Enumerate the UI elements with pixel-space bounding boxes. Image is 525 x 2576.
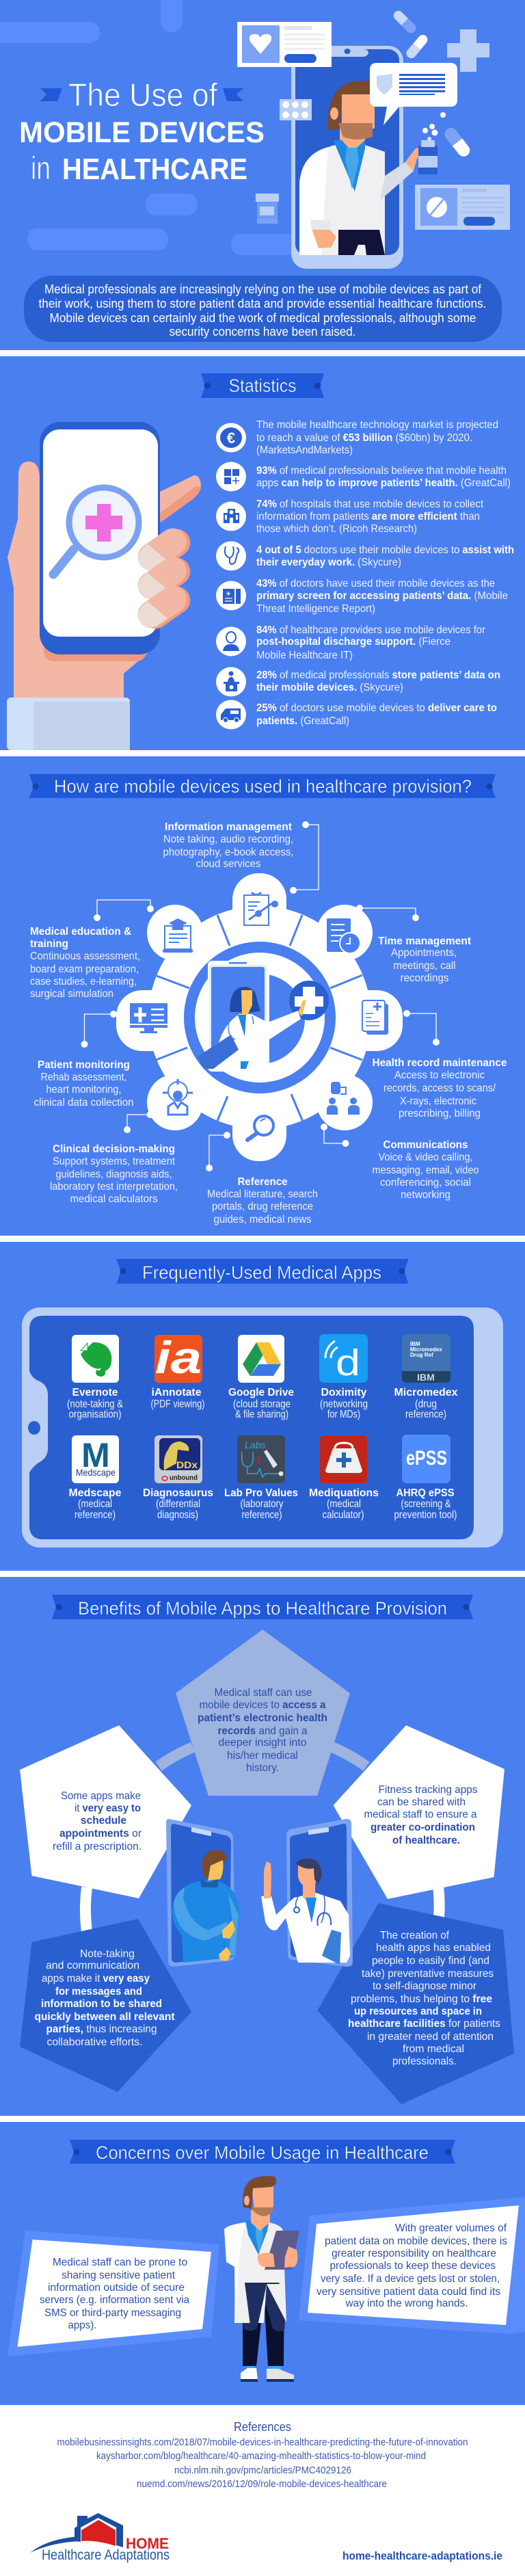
app: doximity: d xyxy=(336,1342,360,1383)
label: communications xyxy=(372,1139,479,1201)
label: reference: portals, drug reference xyxy=(212,1201,313,1212)
label: health record maintenance: records, access to scans/ xyxy=(383,1083,496,1094)
heading: concerns: Concerns over Mobile Usage in Healthcare xyxy=(96,2142,429,2163)
benefit: resources: healthcare facilities for patients xyxy=(348,2018,500,2030)
label: medical education: training xyxy=(30,938,68,950)
references: ncbi.nlm.nih.gov/pmc/articles/PMC4029126 xyxy=(174,2465,351,2476)
label: patient monitoring: heart monitoring, xyxy=(46,1084,122,1096)
concern panel: lost devices: With greater volumes of xyxy=(395,2222,507,2234)
label: clinical decision-making: laboratory test interpretation, xyxy=(50,1181,178,1193)
label: medical education: Medical education & xyxy=(30,926,131,938)
app: epss: (screening & xyxy=(401,1498,451,1510)
heading: statistics xyxy=(201,373,324,398)
small pill bottle xyxy=(256,194,279,224)
medical card with heart xyxy=(237,22,332,67)
app: medscape: reference) xyxy=(75,1509,116,1521)
benefit: scheduling xyxy=(20,1725,191,1898)
app: google drive: & file sharing) xyxy=(235,1409,288,1420)
label: medical education: surgical simulation xyxy=(30,988,113,1000)
title: MOBILE DEVICES xyxy=(19,116,265,149)
benefit: communication xyxy=(20,1919,191,2092)
label: time management: Appointments, xyxy=(391,947,457,959)
benefit: health records xyxy=(176,1630,350,1796)
stat 4 xyxy=(216,542,514,570)
label: clinical decision-making: medical calculators xyxy=(70,1193,157,1205)
benefit: fitness tracking: of healthcare. xyxy=(392,1835,460,1846)
app: diagnosaurus: Diagnosaurus xyxy=(143,1487,213,1499)
stat 2: apps can help to improve patients’ health. (GreatCall) xyxy=(256,477,511,489)
app: iannotate: ia xyxy=(155,1332,202,1383)
references: kaysharbor.com/blog/healthcare/40-amazing-mhealth-statistics-to-blow-your-mind xyxy=(96,2450,426,2462)
stat 8 xyxy=(216,700,497,729)
app: micromedex: IBM xyxy=(410,1341,420,1347)
fingers xyxy=(133,522,196,636)
app: google drive: Google Drive xyxy=(228,1387,294,1398)
references: nuemd.com/news/2016/12/09/role-mobile-devices-healthcare xyxy=(137,2478,387,2490)
stat 1: (MarketsAndMarkets) xyxy=(256,444,353,456)
label: information management: cloud services xyxy=(196,858,261,870)
stat 5: 43% of doctors have used their mobile devices as the xyxy=(256,578,495,589)
sleeve xyxy=(7,698,130,750)
gear diagram xyxy=(116,873,403,1161)
app: micromedex: (drug xyxy=(415,1398,437,1410)
stat 4: their everyday work. (Skycure) xyxy=(256,557,401,568)
concern panel: lost devices: way into the wrong hands. xyxy=(345,2298,468,2309)
benefit: resources: problems, thus helping to free xyxy=(351,1993,492,2005)
stat 5: Threat Intelligence Report) xyxy=(256,603,375,615)
app: iannotate: iAnnotate xyxy=(152,1387,202,1398)
label: health record maintenance: Access to electronic xyxy=(394,1070,485,1081)
header section xyxy=(0,0,510,342)
benefit: health records: his/her medical xyxy=(227,1750,298,1762)
benefit: scheduling: schedule xyxy=(81,1815,126,1827)
app: epss xyxy=(394,1435,457,1521)
stat 1: € xyxy=(227,429,235,447)
references: References xyxy=(234,2420,291,2434)
label: time management: Time management xyxy=(378,935,472,947)
label: health record maintenance: prescribing, billing xyxy=(399,1108,481,1119)
label: information management: photography, e-book access, xyxy=(163,847,294,858)
app: google drive xyxy=(228,1335,294,1420)
benefit: fitness tracking: Fitness tracking apps xyxy=(379,1784,477,1796)
label: medical education: Continuous assessment, xyxy=(30,951,140,962)
label: time management: recordings xyxy=(401,972,448,984)
intro panel: security concerns have been raised. xyxy=(170,325,355,338)
stat 3 xyxy=(216,499,484,535)
app: diagnosaurus: unbound xyxy=(170,1474,198,1482)
website: home-healthcare-adaptations.ie xyxy=(342,2549,502,2562)
stat 8: 25% of doctors use mobile devices to deliver care to xyxy=(256,702,497,714)
illustration: doctor in phone xyxy=(291,46,438,269)
benefit: fitness tracking: can be shared with xyxy=(377,1796,466,1808)
benefit: scheduling: Some apps make xyxy=(61,1790,141,1802)
app: medscape: M xyxy=(81,1436,110,1474)
standing doctor xyxy=(224,2176,299,2382)
speech bubble xyxy=(370,63,457,125)
benefit: resources: from medical xyxy=(403,2043,464,2055)
app: medscape xyxy=(68,1435,122,1521)
intro panel xyxy=(24,276,502,342)
center phone with doctor xyxy=(198,961,329,1072)
icon: health record xyxy=(362,1000,388,1035)
stat 7 xyxy=(216,667,500,696)
benefit: communication: information to be shared xyxy=(41,1998,162,2010)
title xyxy=(19,77,265,186)
icon: people communicating xyxy=(327,1082,360,1115)
label: time management: meetings, call xyxy=(394,960,455,972)
app: micromedex xyxy=(394,1334,458,1420)
benefit: resources: The creation of xyxy=(380,1930,450,1941)
intro panel: Mobile devices can certainly aid the work of medical professionals, although some xyxy=(49,311,476,325)
icon: clipboard xyxy=(244,892,278,925)
stat 2: 93% of medical professionals believe that mobile health xyxy=(256,465,507,477)
connectors xyxy=(81,821,440,1171)
benefit: fitness tracking: greater co-ordination xyxy=(371,1822,475,1833)
label: time management xyxy=(378,935,472,984)
label: health record maintenance: X-rays, electronic xyxy=(400,1096,476,1107)
stat 2 xyxy=(216,462,511,491)
logo: Healthcare Adaptations xyxy=(42,2547,170,2563)
benefit: scheduling: it very easy to xyxy=(75,1803,141,1814)
concern panel: sharing xyxy=(8,2231,219,2356)
label: communications: conferencing, social xyxy=(380,1177,471,1189)
benefit: communication: parties, thus increasing xyxy=(46,2023,157,2035)
intro panel: Medical professionals are increasingly relying on the use of mobile devices as part of xyxy=(44,282,482,296)
benefit: resources: up resources and space in xyxy=(354,2006,482,2017)
app: mediquations: Mediquations xyxy=(309,1487,379,1499)
logo xyxy=(30,2513,170,2563)
app: medscape: (medical xyxy=(78,1498,112,1510)
benefit: resources: in greater need of attention xyxy=(367,2031,494,2043)
label: information management: Information management xyxy=(165,821,293,833)
icon: magnifier xyxy=(247,1116,273,1140)
app: diagnosaurus: diagnosis) xyxy=(157,1509,198,1521)
title: HEALTHCARE xyxy=(62,152,247,186)
concern panel: sharing: Medical staff can be prone to xyxy=(53,2257,187,2268)
stat 3: those which don’t. (Ricoh Research) xyxy=(256,523,417,535)
stat 1 xyxy=(216,419,498,456)
stat 3: information from patients are more efficient than xyxy=(256,511,480,522)
icon: clinical decision xyxy=(163,1079,193,1115)
benefit: resources: professionals. xyxy=(392,2056,457,2067)
title: in xyxy=(31,150,51,186)
label: clinical decision-making xyxy=(50,1143,178,1205)
magnifier with plus xyxy=(53,488,139,574)
concern panel: sharing: servers (e.g. information sent via xyxy=(40,2294,189,2306)
title ribbon right xyxy=(223,88,243,101)
app: medscape: Medscape xyxy=(76,1467,116,1478)
label: information management xyxy=(163,821,294,870)
concern panel: sharing: apps). xyxy=(68,2320,97,2331)
icon: medical plus xyxy=(447,29,489,72)
app: micromedex: Micromedex xyxy=(410,1346,442,1353)
label: communications: networking xyxy=(401,1189,450,1201)
label: patient monitoring: Rehab assessment, xyxy=(41,1072,127,1083)
label: clinical decision-making: guidelines, diagnosis aids, xyxy=(56,1169,172,1180)
label: clinical decision-making: Support systems, treatment xyxy=(53,1156,176,1167)
benefit: resources xyxy=(317,1903,514,2104)
icon: monitor xyxy=(130,1003,167,1033)
app: epss: ePSS xyxy=(406,1447,447,1470)
benefit: communication: apps make it very easy xyxy=(42,1973,150,1984)
label: clinical decision-making: Clinical decision-making xyxy=(53,1143,175,1155)
app: lab pro values xyxy=(224,1435,298,1521)
label: communications: messaging, email, video xyxy=(372,1165,479,1176)
app: lab pro values: Labs xyxy=(245,1439,265,1450)
prescription card xyxy=(415,185,510,230)
benefit: fitness tracking: medical staff to ensure a xyxy=(364,1809,477,1820)
label: health record maintenance: Health record maintenance xyxy=(372,1057,507,1069)
label: patient monitoring: clinical data collection xyxy=(34,1097,134,1108)
footer panel xyxy=(0,2405,525,2576)
concern panel: lost devices: patient data on mobile devices, there is xyxy=(325,2235,507,2247)
concern panel: sharing: information outside of secure xyxy=(48,2282,185,2294)
benefit: health records: mobile devices to access a xyxy=(200,1699,326,1711)
intro panel: their work, using them to store patient data and provide essential healthcare functions. xyxy=(38,297,487,310)
stat 1: to reach a value of €53 billion ($60bn) by 2020. xyxy=(256,432,472,444)
benefit: communication: collaborative efforts. xyxy=(46,2036,142,2048)
icon: schedule and clock xyxy=(327,918,360,953)
heading: benefits: Benefits of Mobile Apps to Healthcare Provision xyxy=(78,1598,447,1619)
app: evernote: organisation) xyxy=(68,1409,122,1420)
phone with doctor xyxy=(261,1819,353,1967)
icon: pills xyxy=(392,9,472,159)
benefit: communication: and communication xyxy=(46,1960,139,1971)
benefit: communication: for messages and xyxy=(55,1986,142,1997)
app: micromedex: reference) xyxy=(405,1409,446,1420)
app: mediquations xyxy=(309,1435,379,1521)
references xyxy=(57,2420,468,2490)
stat 8: patients. (GreatCall) xyxy=(256,715,349,727)
label: reference: Medical literature, search xyxy=(207,1189,318,1200)
stat 6 xyxy=(216,624,486,661)
app: micromedex: IBM xyxy=(417,1372,435,1383)
illustration: hand holding phone xyxy=(7,422,201,750)
heading: frequently-used medical apps: Frequently-Used Medical Apps xyxy=(142,1262,381,1283)
label: medical education: case studies, e-learning, xyxy=(30,976,137,987)
app: micromedex: Micromedex xyxy=(394,1387,458,1398)
title ribbon left xyxy=(40,88,62,101)
app: doximity: for MDs) xyxy=(327,1409,360,1420)
concern panel: lost devices: very safe. If a device gets lost or stolen, xyxy=(321,2273,500,2285)
concern panel: lost devices: very sensitive patient data could find its xyxy=(317,2286,500,2298)
stat 5 xyxy=(216,578,508,615)
benefit: health records: records and gain a xyxy=(217,1725,308,1737)
stat 3: 74% of hospitals that use mobile devices to collect xyxy=(256,499,484,510)
benefit: resources: health apps has enabled xyxy=(376,1942,491,1954)
app: micromedex: Drug Ref xyxy=(410,1352,433,1358)
stat 6: Mobile Healthcare IT) xyxy=(256,650,353,661)
icon: e-learning xyxy=(163,918,193,953)
app: google drive: (cloud storage xyxy=(233,1398,291,1410)
app: doximity: (networking xyxy=(320,1398,368,1410)
references: mobilebusinessinsights.com/2018/07/mobile-devices-in-healthcare-predicting-the-future-of-innovation xyxy=(57,2436,468,2448)
stat 7: 28% of medical professionals store patients’ data on xyxy=(256,669,500,681)
benefit: resources: take) preventative measures xyxy=(362,1968,494,1980)
logo: HOME xyxy=(126,2535,169,2552)
stat 4: 4 out of 5 doctors use their mobile devices to assist with xyxy=(256,544,514,556)
title: The Use of xyxy=(68,77,218,113)
label: medical education xyxy=(30,926,140,1000)
benefit: resources: to self-diagnose minor xyxy=(373,1980,477,1992)
app: diagnosaurus xyxy=(143,1435,213,1521)
concern panel: lost devices: professionals to keep these devices xyxy=(329,2260,496,2272)
stat 7: their mobile devices. (Skycure) xyxy=(256,682,403,693)
benefit: health records: Medical staff can use xyxy=(215,1687,312,1699)
concern panel: sharing: SMS or third-party messaging xyxy=(44,2307,181,2319)
label: patient monitoring xyxy=(34,1059,134,1108)
app: diagnosaurus: DDx xyxy=(176,1459,198,1470)
app: lab pro values: reference) xyxy=(242,1509,282,1521)
benefit: scheduling: appointments or xyxy=(59,1828,142,1840)
heading: how are mobile devices used: How are mobile devices used in healthcare provision? xyxy=(54,776,472,797)
benefit: scheduling: refill a prescription. xyxy=(53,1841,142,1853)
stat 6: 84% of healthcare providers use mobile devices for xyxy=(256,624,486,636)
stat 5: primary screen for accessing patients’ data. (Mobile xyxy=(256,590,508,602)
label: information management: Note taking, audio recording, xyxy=(163,834,293,845)
stat 1: The mobile healthcare technology market is projected xyxy=(256,419,498,431)
benefit: health records: deeper insight into xyxy=(219,1737,307,1749)
label: reference: Reference xyxy=(238,1176,288,1188)
stat 6: post-hospital discharge support. (Fierce xyxy=(256,636,450,648)
label: reference: guides, medical news xyxy=(213,1214,312,1225)
app: epss: prevention tool) xyxy=(394,1509,457,1521)
label: communications: Voice & video calling, xyxy=(379,1152,473,1163)
app: iannotate: (PDF viewing) xyxy=(150,1398,205,1410)
label: patient monitoring: Patient monitoring xyxy=(38,1059,130,1071)
app: doximity: Doximity xyxy=(321,1387,367,1398)
app: mediquations: calculator) xyxy=(323,1509,364,1521)
app: iannotate xyxy=(150,1332,205,1410)
app: evernote: (note-taking & xyxy=(67,1398,123,1410)
phone with patient xyxy=(166,1819,239,1967)
benefit: communication: quickly between all relevant xyxy=(34,2011,175,2023)
label: communications: Communications xyxy=(383,1139,468,1151)
app: mediquations: (medical xyxy=(327,1498,361,1510)
app: evernote: Evernote xyxy=(72,1387,118,1398)
app: lab pro values: (laboratory xyxy=(241,1498,283,1510)
concern panel: lost devices: greater responsibility on healthcare xyxy=(332,2248,496,2259)
app: evernote xyxy=(67,1335,123,1420)
label: reference xyxy=(207,1176,318,1225)
label: health record maintenance xyxy=(372,1057,507,1119)
benefit: health records: patient’s electronic health xyxy=(198,1712,327,1724)
app: doximity xyxy=(319,1334,368,1420)
benefit: fitness tracking xyxy=(334,1725,504,1899)
app: diagnosaurus: (differential xyxy=(156,1498,200,1510)
benefit: resources: people to easily find (and xyxy=(372,1955,489,1967)
app: medscape: Medscape xyxy=(68,1487,122,1499)
tablet panel xyxy=(22,1307,503,1548)
concern panel: lost devices xyxy=(299,2197,525,2334)
app: epss: AHRQ ePSS xyxy=(396,1487,455,1499)
benefit: health records: history. xyxy=(246,1762,279,1774)
label: medical education: board exam preparation, xyxy=(30,964,139,975)
app: lab pro values: Lab Pro Values xyxy=(224,1487,298,1499)
concern panel: sharing: sharing sensitive patient xyxy=(62,2270,176,2281)
blister pack xyxy=(280,99,312,120)
connecting ring xyxy=(85,1747,440,1932)
benefit: communication: Note-taking xyxy=(80,1948,135,1960)
heading: statistics: Statistics xyxy=(228,375,297,396)
